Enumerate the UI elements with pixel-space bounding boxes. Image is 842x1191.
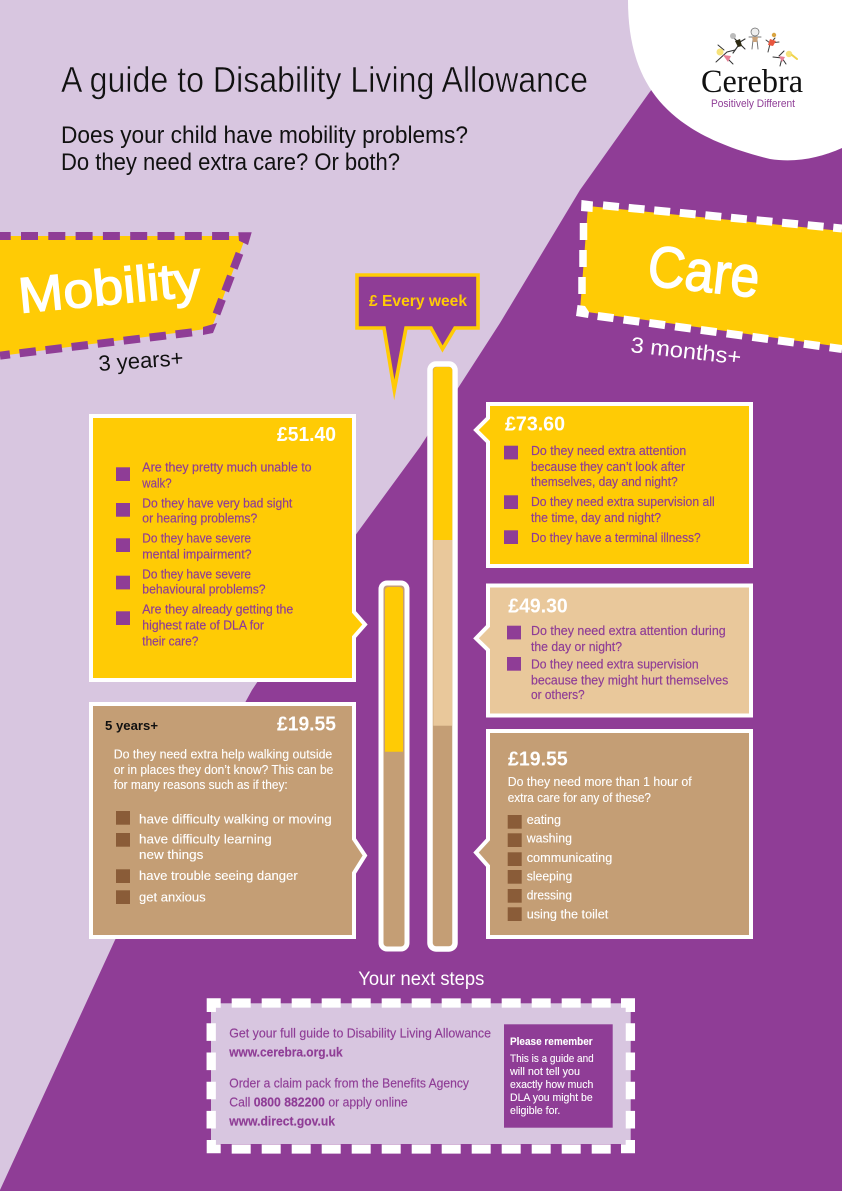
subtitle: Do they need extra care? Or both?	[61, 149, 400, 176]
question: sight or hearing	[116, 496, 293, 526]
question: behavioural problems: Do they have severe	[142, 567, 251, 582]
text: get the guide	[228, 1027, 491, 1060]
logo: Cerebra	[628, 0, 842, 160]
question: unable to walk: walk?	[141, 476, 172, 490]
amount: £19.55: £19.55	[277, 714, 336, 736]
item: difficulty learning: have difficulty learning	[139, 831, 272, 846]
item: dressing: dressing	[527, 888, 572, 903]
bar chart: mobility rates	[381, 583, 407, 949]
panel: next steps	[207, 998, 635, 1153]
callout: every week	[357, 275, 478, 390]
question: might hurt themselves: because they might hurt themselves	[531, 672, 729, 687]
intro text: or in places they don’t know? This can be	[114, 762, 333, 777]
text: order a claim pack: www.direct.gov.uk	[228, 1115, 335, 1129]
callout: please remember: DLA you might be	[510, 1092, 593, 1104]
question: highest rate of DLA: Are they already getting the	[142, 602, 293, 617]
panel: mobility lower rate	[91, 704, 365, 937]
panel: care lower rate	[476, 731, 751, 937]
label: 5 years+: 5 years+	[105, 718, 158, 733]
heading: Your next steps: Your next steps	[358, 969, 484, 990]
question: sight or hearing: or hearing problems?	[142, 511, 257, 526]
question: unable to walk: Are they pretty much unable to	[142, 460, 312, 475]
panel: care middle rate	[476, 586, 751, 716]
question: highest rate of DLA: highest rate of DLA for	[142, 618, 265, 633]
question: might hurt themselves: or others?	[531, 687, 585, 702]
callout: please remember	[504, 1024, 613, 1128]
question: behavioural problems: behavioural problems?	[142, 582, 266, 597]
question: extra supervision: the time, day and night?	[531, 510, 661, 525]
question: mental impairment: Do they have severe	[142, 531, 251, 546]
text: order a claim pack: Order a claim pack from the Benefits Agency	[229, 1077, 470, 1091]
item: communicating: communicating	[527, 850, 612, 865]
intro text	[114, 746, 333, 792]
callout: every week: £ Every week	[369, 293, 467, 310]
question: extra attention	[504, 443, 686, 489]
question: might hurt themselves: Do they need extra supervision	[531, 656, 699, 671]
subtitle	[61, 122, 468, 176]
question: attention day or night	[507, 623, 726, 654]
item: washing	[508, 831, 572, 847]
item: dressing	[508, 888, 572, 903]
banner: Mobility	[0, 232, 252, 356]
question: extra supervision: Do they need extra supervision all	[531, 494, 715, 509]
item: eating: eating	[527, 812, 561, 827]
item: eating	[508, 812, 561, 829]
panel: care higher rate	[476, 404, 751, 566]
text: order a claim pack	[228, 1077, 470, 1129]
item: walking or moving: have difficulty walking or moving	[139, 811, 332, 826]
callout: please remember: This is a guide and	[510, 1053, 594, 1065]
panel: mobility higher rate	[91, 416, 365, 680]
amount: £19.55: £19.55	[508, 748, 568, 770]
heading: Mobility: Mobility	[16, 251, 203, 324]
callout: please remember: eligible for.	[510, 1105, 560, 1117]
icon: children figures	[716, 28, 797, 66]
logo tagline: Positively Different	[711, 98, 795, 110]
amount: £73.60: £73.60	[505, 414, 565, 436]
intro text: for many reasons such as if they:	[114, 777, 288, 792]
item: sleeping: sleeping	[527, 869, 572, 884]
bar chart: care rates	[430, 364, 455, 949]
text: get the guide: www.cerebra.org.uk	[228, 1046, 343, 1060]
question: mental impairment: mental impairment?	[142, 546, 252, 561]
title: A guide to Disability Living Allowance	[61, 59, 588, 100]
question: extra attention: Do they need extra attention	[531, 443, 686, 458]
question: extra supervision	[504, 494, 715, 525]
item: difficulty learning	[116, 831, 272, 862]
question: unable to walk	[116, 460, 312, 490]
item: sleeping	[508, 869, 572, 884]
intro text: Do they need extra help walking outside	[114, 746, 332, 761]
banner: Care	[576, 200, 842, 349]
label: 3 months+: 3 months+	[629, 332, 743, 370]
question: behavioural problems	[116, 567, 266, 597]
question: might hurt themselves	[507, 656, 729, 702]
amount: £51.40: £51.40	[277, 424, 336, 446]
intro text: Do they need more than 1 hour of	[508, 774, 692, 789]
text: get the guide: Get your full guide to Disability Living Allowance	[229, 1027, 491, 1041]
intro text: extra care for any of these?	[508, 790, 651, 805]
item: seeing danger: have trouble seeing danger	[139, 868, 298, 883]
intro text	[508, 774, 692, 805]
text: order a claim pack: Call 0800 882200 or apply online	[229, 1096, 408, 1110]
question: extra attention: because they can’t look after	[531, 459, 686, 474]
question: attention day or night: the day or night?	[531, 639, 622, 654]
question: sight or hearing: Do they have very bad sight	[142, 496, 293, 511]
question: highest rate of DLA: their care?	[142, 633, 198, 648]
item: anxious: get anxious	[139, 890, 206, 904]
callout: please remember: exactly how much	[510, 1079, 593, 1091]
item: difficulty learning: new things	[139, 847, 204, 862]
logo wordmark: Cerebra	[701, 64, 803, 100]
item: washing: washing	[526, 831, 572, 846]
question: highest rate of DLA	[116, 602, 293, 648]
question: mental impairment	[116, 531, 252, 561]
amount: £49.30: £49.30	[508, 595, 568, 617]
question: attention day or night: Do they need extra attention during	[531, 623, 726, 638]
question: terminal illness: Do they have a terminal illness?	[531, 530, 701, 545]
callout: please remember: will not tell you	[509, 1066, 580, 1078]
label: 3 years+: 3 years+	[98, 345, 184, 376]
subtitle: Does your child have mobility problems?	[61, 122, 468, 149]
callout: please remember: Please remember	[510, 1036, 593, 1048]
item: using the toilet: using the toilet	[527, 907, 609, 922]
question: extra attention: themselves, day and night?	[531, 474, 678, 489]
heading: Care: Care	[645, 233, 763, 311]
